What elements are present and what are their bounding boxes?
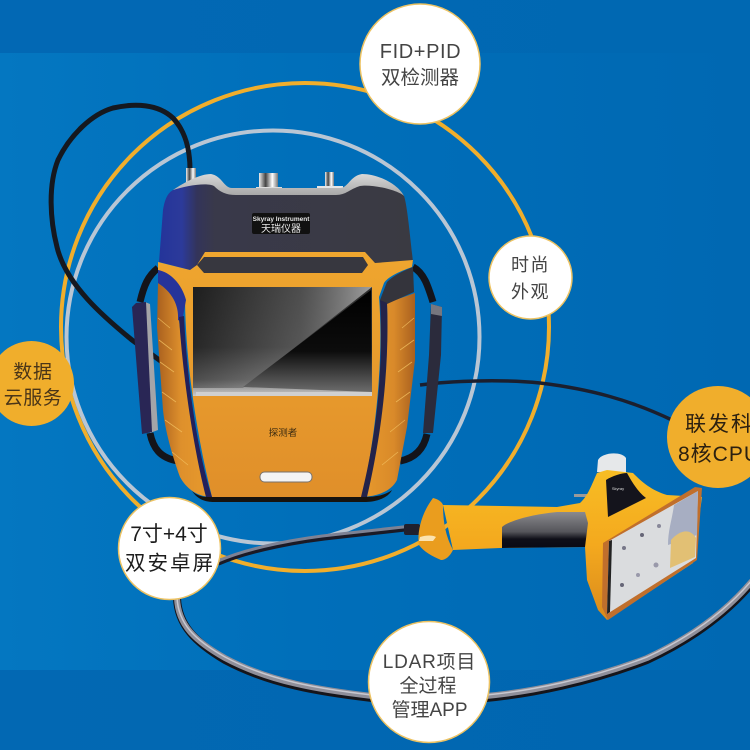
bubble: LDAR项目全过程管理APP: 全过程 — [399, 675, 457, 697]
bubble: 数据云服务: 数据 — [13, 361, 53, 383]
orbit ring: silver — [66, 130, 480, 544]
stripe: left — [179, 316, 212, 497]
gun screen bezel — [602, 487, 702, 620]
unit blue left trim — [158, 270, 186, 322]
cable: top probe loop — [51, 105, 190, 362]
detector main unit — [157, 168, 415, 502]
handheld gun — [404, 453, 702, 620]
bubble: FID+PID: FID+PID — [380, 41, 461, 63]
gun black label — [606, 473, 646, 517]
bubble: LDAR项目全过程管理APP — [368, 622, 490, 742]
gun black label: Skyray — [612, 486, 624, 491]
bubble: LDAR项目全过程管理APP: 管理APP — [391, 699, 468, 721]
cable: lower loop — [177, 580, 750, 698]
bubble: FID+PID: 双检测器 — [381, 67, 459, 89]
bubble: LDAR项目全过程管理APP: LDAR项目 — [383, 652, 476, 673]
brand plate: Skyray Instrument — [253, 216, 310, 223]
bubble: 时尚外观 — [489, 236, 572, 319]
unit dark right trim — [380, 267, 414, 304]
unit shoulder — [173, 174, 404, 215]
bubble: 时尚外观: 时尚 — [511, 255, 550, 275]
gun screen — [607, 491, 698, 614]
cable: right to CPU bubble — [420, 381, 672, 420]
gun end cap — [418, 498, 453, 560]
unit side: left — [157, 283, 210, 497]
grille bar — [197, 257, 368, 273]
side ribs — [158, 318, 414, 465]
cable: screen bubble to handheld gun — [218, 526, 412, 563]
unit bottom edge — [192, 490, 392, 502]
strap: right — [400, 267, 442, 461]
bubble: 7寸+4寸双安卓屏: 双安卓屏 — [125, 552, 215, 575]
strap: left — [132, 268, 178, 461]
bubble: 时尚外观: 外观 — [511, 282, 550, 302]
power button — [260, 472, 312, 482]
gun pin — [574, 494, 588, 497]
gun grip — [502, 512, 588, 548]
connector: center port — [256, 173, 282, 191]
screen — [193, 287, 372, 396]
bubble: 数据云服务: 云服务 — [4, 387, 62, 409]
bubble: 数据云服务 — [0, 341, 74, 426]
brand plate — [252, 213, 310, 235]
cable plug — [404, 524, 420, 535]
stripe: right — [361, 300, 387, 497]
connector: right port — [317, 172, 343, 191]
gun end cap highlight — [419, 536, 436, 541]
unit upper shell — [159, 184, 413, 270]
bubble: 7寸+4寸双安卓屏: 7寸+4寸 — [130, 523, 208, 546]
bubble: 7寸+4寸双安卓屏 — [118, 498, 220, 600]
bubble: 联发科8核CPU — [667, 386, 750, 488]
brand plate: 天瑞仪器 — [261, 223, 301, 235]
gun body — [443, 470, 702, 620]
connector: left port — [186, 168, 196, 182]
product name: 探测者 — [269, 427, 297, 439]
bubble: FID+PID — [360, 4, 480, 124]
unit side: right — [362, 293, 415, 497]
unit center panel — [158, 252, 413, 497]
orbit ring: gold — [61, 83, 549, 571]
gun top cap — [597, 453, 626, 473]
